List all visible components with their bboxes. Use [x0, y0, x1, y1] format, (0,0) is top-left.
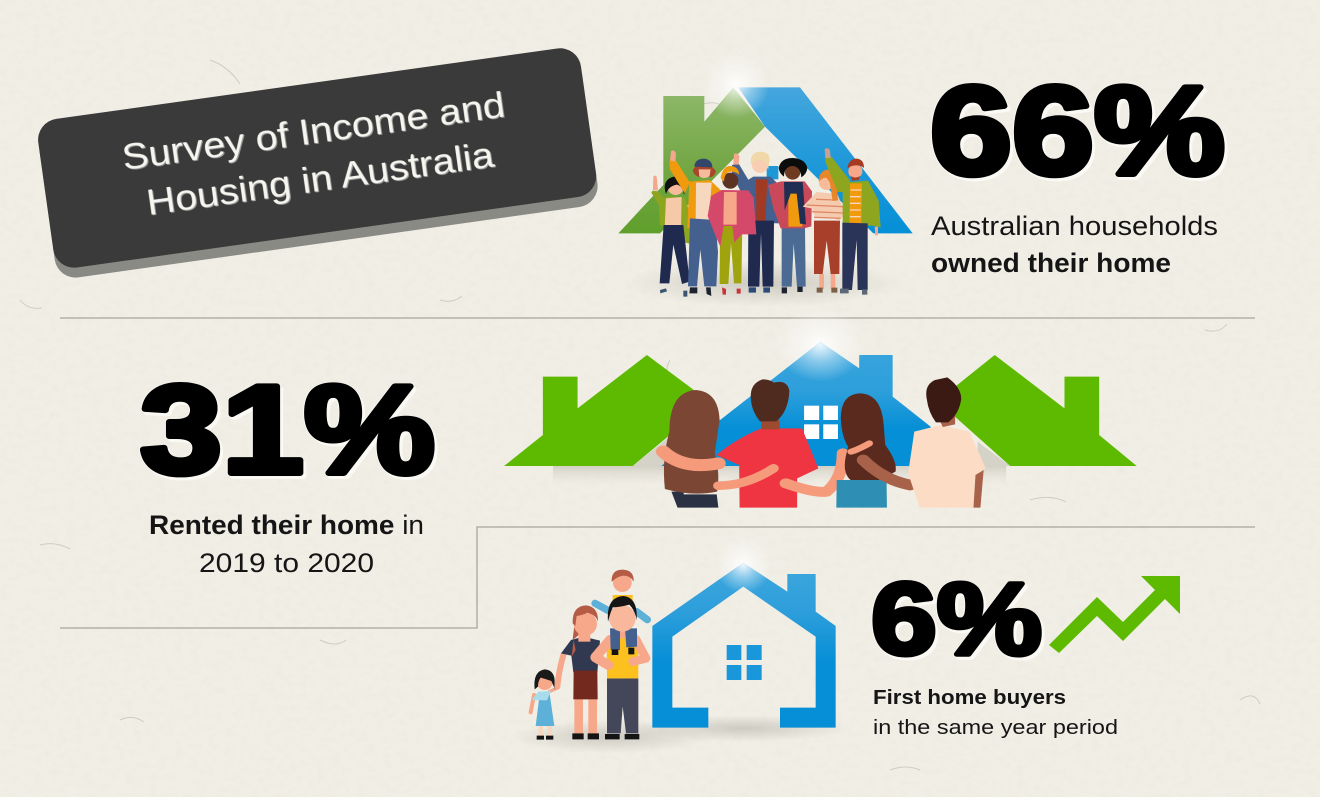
small girl [531, 669, 558, 740]
child on shoulders [595, 570, 647, 655]
person 5 [768, 158, 812, 293]
statistic: 6% first home buyers: 6% [871, 562, 1042, 676]
man in red shirt [716, 379, 818, 508]
title badge: Survey of Income and [119, 84, 507, 178]
blue house half [738, 87, 913, 233]
statistic: 31% renters: Rented their home in [149, 510, 424, 540]
illustration: three houses with two couples [504, 308, 1137, 508]
divider lines [60, 318, 1255, 628]
mother [557, 605, 600, 739]
person 7 [825, 148, 881, 295]
statistic: 6% first home buyers: in the same year period [873, 716, 1118, 739]
illustration: house and group of seven people [618, 52, 913, 307]
arm around woman [663, 452, 718, 465]
woman with long brown hair [664, 390, 720, 508]
person 4 [732, 152, 779, 293]
statistic: 6% first home buyers: First home buyers [873, 686, 1066, 709]
statistic: 66% owners: 66% [930, 60, 1225, 201]
title badge: Housing in Australia [144, 133, 497, 223]
statistic: 31% renters: 2019 to 2020 [199, 548, 374, 578]
icon: green rising arrow [1049, 576, 1180, 653]
title badge [35, 46, 600, 280]
person 1 [651, 176, 691, 297]
left green house [504, 355, 694, 466]
right green house [953, 355, 1137, 466]
man in cream shirt [863, 377, 986, 508]
person 2 [669, 150, 723, 296]
person 3 [708, 166, 756, 295]
statistic: 31% renters [140, 359, 435, 578]
father with child on shoulders [595, 570, 647, 739]
statistic: 66% owners [930, 60, 1225, 278]
statistic: 66% owners: Australian households [931, 211, 1218, 241]
house window [727, 645, 762, 680]
blue house outline [652, 563, 836, 728]
blue house [661, 342, 931, 466]
woman with dark long hair [836, 393, 896, 508]
statistic: 66% owners: owned their home [931, 248, 1171, 278]
statistic: 31% renters: 31% [140, 359, 435, 500]
window [804, 406, 838, 439]
green house half [618, 87, 765, 233]
person 6 [803, 170, 846, 293]
statistic: 6% first home buyers [871, 562, 1118, 739]
ground shadow [553, 435, 1010, 487]
illustration: family and blue house outline [510, 537, 850, 753]
embracing arms [718, 447, 865, 492]
